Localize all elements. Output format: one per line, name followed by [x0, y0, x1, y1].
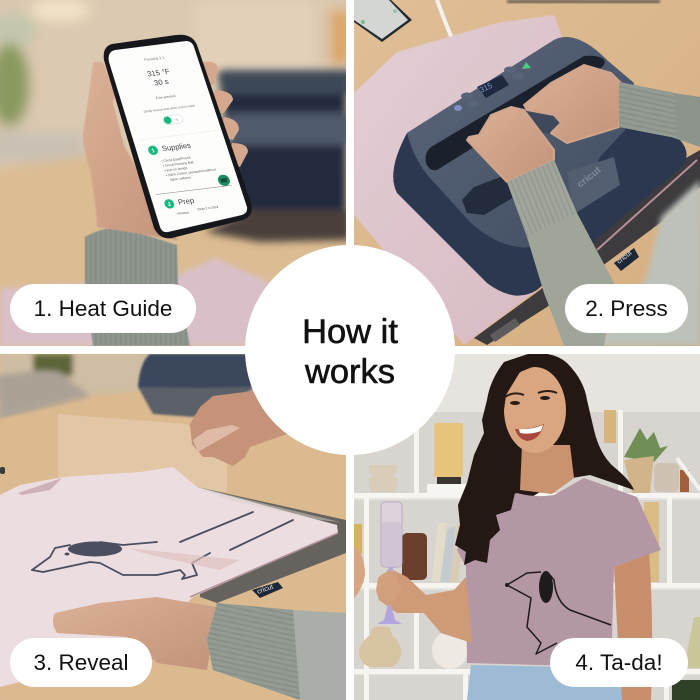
far sweater blur — [597, 180, 700, 346]
display — [477, 75, 509, 98]
champagne glass — [377, 502, 402, 624]
phone screen content: • Iron-on design — [164, 166, 188, 173]
bottom right plant — [672, 680, 700, 700]
phone screen content: 315 °F — [146, 67, 171, 78]
brows, eyes and smile — [505, 391, 557, 441]
neck — [520, 445, 574, 494]
back sweater sleeve — [619, 82, 700, 147]
center circle title: How it works — [245, 245, 455, 455]
front sweater sleeve — [507, 160, 614, 346]
hand holding phone — [83, 62, 178, 240]
cricut tag: cricut — [256, 584, 274, 596]
shelf frame — [354, 410, 700, 700]
phone screen content: Pressing 3.1 — [144, 56, 165, 62]
power cord — [435, 0, 453, 38]
left arm and hand — [376, 568, 472, 643]
display: 315 — [478, 81, 494, 95]
amber jar — [402, 533, 427, 580]
cricut tag — [614, 248, 639, 271]
cricut tag: cricut — [616, 250, 633, 266]
pressing mat — [474, 150, 700, 345]
press handle — [524, 108, 562, 134]
heat press body — [393, 37, 687, 296]
stacked vase — [369, 465, 397, 492]
arm right — [614, 552, 652, 700]
panel: 3. Reveal — [0, 354, 346, 700]
sweater sleeve — [85, 227, 190, 346]
pink t-shirt on table — [0, 258, 270, 346]
phone screen content: • Cricut EasyPress® — [161, 156, 192, 163]
hair back — [480, 353, 634, 510]
logo on press: cricut — [575, 165, 604, 190]
lamp — [427, 423, 470, 493]
phone screen content: Fine pressed — [156, 94, 176, 100]
phone screen content: fabric softener — [170, 175, 192, 182]
center circle title: How it works: How it — [302, 313, 398, 351]
fingers on glass — [376, 572, 402, 606]
phone screen content: • 100% Cotton, prewashed without — [165, 167, 216, 177]
label: 4. Ta-da!: 4. Ta-da! — [575, 650, 663, 675]
hand peeling liner — [190, 391, 287, 466]
label: 2. Press: 2. Press — [585, 296, 668, 321]
room background — [0, 0, 352, 350]
potted plant — [624, 428, 679, 493]
panel: 4. Ta-da! — [354, 353, 700, 700]
friend's hand at left edge — [354, 545, 365, 598]
panel: 2. Press — [354, 0, 700, 346]
dachshund design — [32, 512, 293, 579]
label: 1. Heat Guide — [10, 284, 196, 333]
white ball vase — [432, 631, 468, 669]
phone screen content: 30 s — [153, 77, 170, 87]
phone screen content: 1 — [151, 148, 156, 154]
phone screen content: Clean 2 to 2019 — [197, 205, 219, 211]
shelf cubbies — [354, 412, 700, 700]
label: 1. Heat Guide: 1. Heat Guide — [34, 296, 172, 321]
heat press in background — [138, 354, 252, 417]
heat press lid — [407, 37, 634, 248]
face — [504, 367, 566, 453]
sweater cuff and sleeve — [207, 603, 346, 700]
upper handle slot — [426, 56, 605, 170]
wood table — [354, 0, 700, 346]
panel: 1. Heat Guide — [0, 0, 352, 350]
hand on handle, front — [467, 107, 554, 182]
hand on handle, back — [524, 65, 621, 143]
books on shelves — [354, 410, 700, 668]
shirt sleeve shadow — [18, 478, 62, 495]
center circle title: How it works: works — [304, 353, 395, 391]
hand on shirt — [53, 597, 217, 670]
phone screen content — [140, 56, 232, 215]
label: 3. Reveal: 3. Reveal — [33, 650, 129, 675]
wall — [354, 354, 700, 700]
transparent liner film — [58, 414, 227, 492]
phone screen content: °c — [175, 117, 179, 122]
cricut tag — [252, 582, 283, 598]
glossy right side — [567, 157, 620, 214]
phone screen content: Gently remove liner when cool to touch — [143, 104, 196, 114]
phone screen content: • Cricut Pressing Mat — [162, 160, 194, 168]
press buttons — [454, 62, 531, 111]
phone on table — [354, 0, 412, 42]
mauve t-shirt — [457, 478, 661, 667]
phone screen content: Prep — [177, 196, 195, 207]
fingers behind phone — [200, 62, 248, 167]
ceramic vase — [359, 626, 401, 667]
phone — [104, 35, 252, 238]
phone screen content: Supplies — [161, 141, 192, 153]
phone screen content: 2 — [167, 202, 172, 208]
transfer liner still on shirt — [128, 548, 240, 570]
dachshund design on worn shirt — [505, 571, 611, 654]
label: 4. Ta-da! — [550, 638, 688, 687]
fingertips — [193, 425, 240, 452]
pressing mat — [197, 487, 346, 603]
lower handle slot — [462, 177, 512, 215]
label: 2. Press — [565, 284, 688, 333]
t-shirt — [0, 467, 338, 687]
liner over shirt — [197, 487, 340, 522]
phone screen content: • Preheat — [176, 210, 189, 216]
jeans — [467, 665, 622, 700]
pink t-shirt — [354, 14, 562, 346]
room background — [0, 354, 346, 700]
shirt folded edge — [190, 533, 338, 597]
hair front — [455, 353, 545, 565]
label: 3. Reveal — [10, 638, 152, 687]
